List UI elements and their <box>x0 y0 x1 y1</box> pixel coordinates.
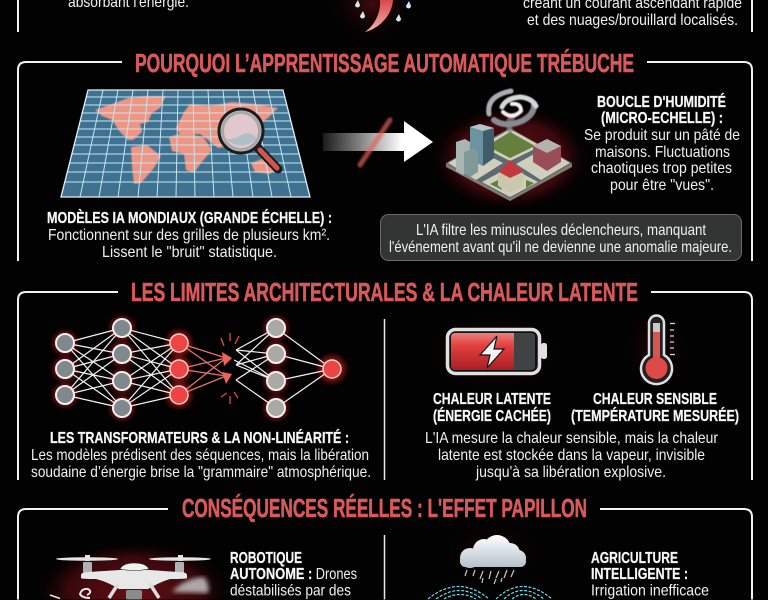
callout: AI filters triggers <box>380 214 742 260</box>
node column 1 <box>56 334 74 404</box>
text: moisture loop: chaotiques trop petites <box>591 160 732 177</box>
text: smart agriculture <box>591 550 709 600</box>
text: updraft description: et des nuages/brouillard localisés. <box>527 12 738 29</box>
text: global AI models: Fonctionnent sur des grilles de plusieurs km². <box>48 227 330 244</box>
panel: top section fragment <box>18 0 752 40</box>
text: moisture loop: BOUCLE D'HUMIDITÉ <box>597 92 726 111</box>
text: heat explanation: jusqu'à sa libération explosive. <box>475 464 666 481</box>
icon: rain cloud with sensor waves <box>428 522 552 599</box>
text: autonomous robotics: déstabilisés par des <box>230 582 351 600</box>
text: updraft description <box>523 0 742 29</box>
panel: real consequences <box>18 494 752 600</box>
text: smart agriculture: Irrigation inefficace <box>591 582 709 600</box>
text: smart agriculture: AGRICULTURE <box>591 550 678 567</box>
label: sensible heat: CHALEUR SENSIBLE <box>593 391 717 408</box>
map: world grid with magnifier <box>61 90 310 197</box>
text: transformers and non-linearity <box>31 428 371 481</box>
text: global AI models: Lissent le "bruit" statistique. <box>102 244 277 261</box>
icon: magnifying glass <box>219 109 278 169</box>
heading: conséquences réelles: CONSÉQUENCES RÉELLES : L'EFFET PAPILLON <box>182 494 587 523</box>
text: heat explanation: L'IA mesure la chaleur sensible, mais la chaleur <box>425 430 719 447</box>
text: moisture loop: maisons. Fluctuations <box>595 144 730 161</box>
text: moisture loop: Se produit sur un pâté de <box>584 127 740 144</box>
icon: red vortex with drops <box>330 0 414 40</box>
text: autonomous robotics: ROBOTIQUE <box>230 550 302 567</box>
text: transformers and non-linearity: soudaine d’énergie brise la "grammaire" atmosphérique. <box>31 464 371 481</box>
icon: isometric city block with vortex <box>432 91 588 210</box>
text: transformers and non-linearity: Les modèles prédisent des séquences, mais la libération <box>31 447 369 464</box>
red node column <box>170 334 188 404</box>
text: global AI models: MODÈLES IA MONDIAUX (GRANDE ÉCHELLE) : <box>47 208 332 227</box>
text: autonomous robotics <box>230 550 357 600</box>
icon: thermometer <box>626 308 686 392</box>
label: sensible heat <box>571 391 739 425</box>
chart: neural network breaking <box>53 316 346 420</box>
sub-icon: red houses <box>498 139 561 193</box>
text: global AI models <box>47 208 332 261</box>
node column 2 <box>113 319 131 417</box>
output node <box>323 360 341 378</box>
text: heat explanation <box>425 430 719 481</box>
text: moisture loop: pour être "vues". <box>610 177 714 194</box>
label: latent heat: (ÉNERGIE CACHÉE) <box>433 406 551 425</box>
sub-icon: swirl <box>489 91 536 130</box>
text: smart agriculture: INTELLIGENTE : <box>591 566 688 583</box>
text: moisture loop: (MICRO-ECHELLE) : <box>601 110 723 127</box>
label: latent heat: CHALEUR LATENTE <box>433 391 551 408</box>
label: latent heat <box>433 391 551 425</box>
panel: why machine learning stumbles <box>18 49 752 261</box>
callout: AI filters triggers: L'IA filtre les minuscules déclencheurs, manquant <box>416 222 706 239</box>
icon: battery <box>430 314 560 390</box>
text: moisture loop <box>584 92 740 194</box>
text: autonomous robotics: AUTONOME : Drones <box>230 566 357 583</box>
text: heat explanation: latente est stockée dans la vapeur, invisible <box>438 447 705 464</box>
icon: drone in turbulence <box>38 540 230 600</box>
arrow: filtered signal <box>323 120 433 165</box>
text: transformers and non-linearity: LES TRANSFORMATEURS & LA NON-LINÉARITÉ : <box>50 428 349 447</box>
panel: architectural limits and latent heat <box>18 279 752 481</box>
grey node column <box>267 319 285 417</box>
sub-icon: tall towers <box>456 124 494 177</box>
